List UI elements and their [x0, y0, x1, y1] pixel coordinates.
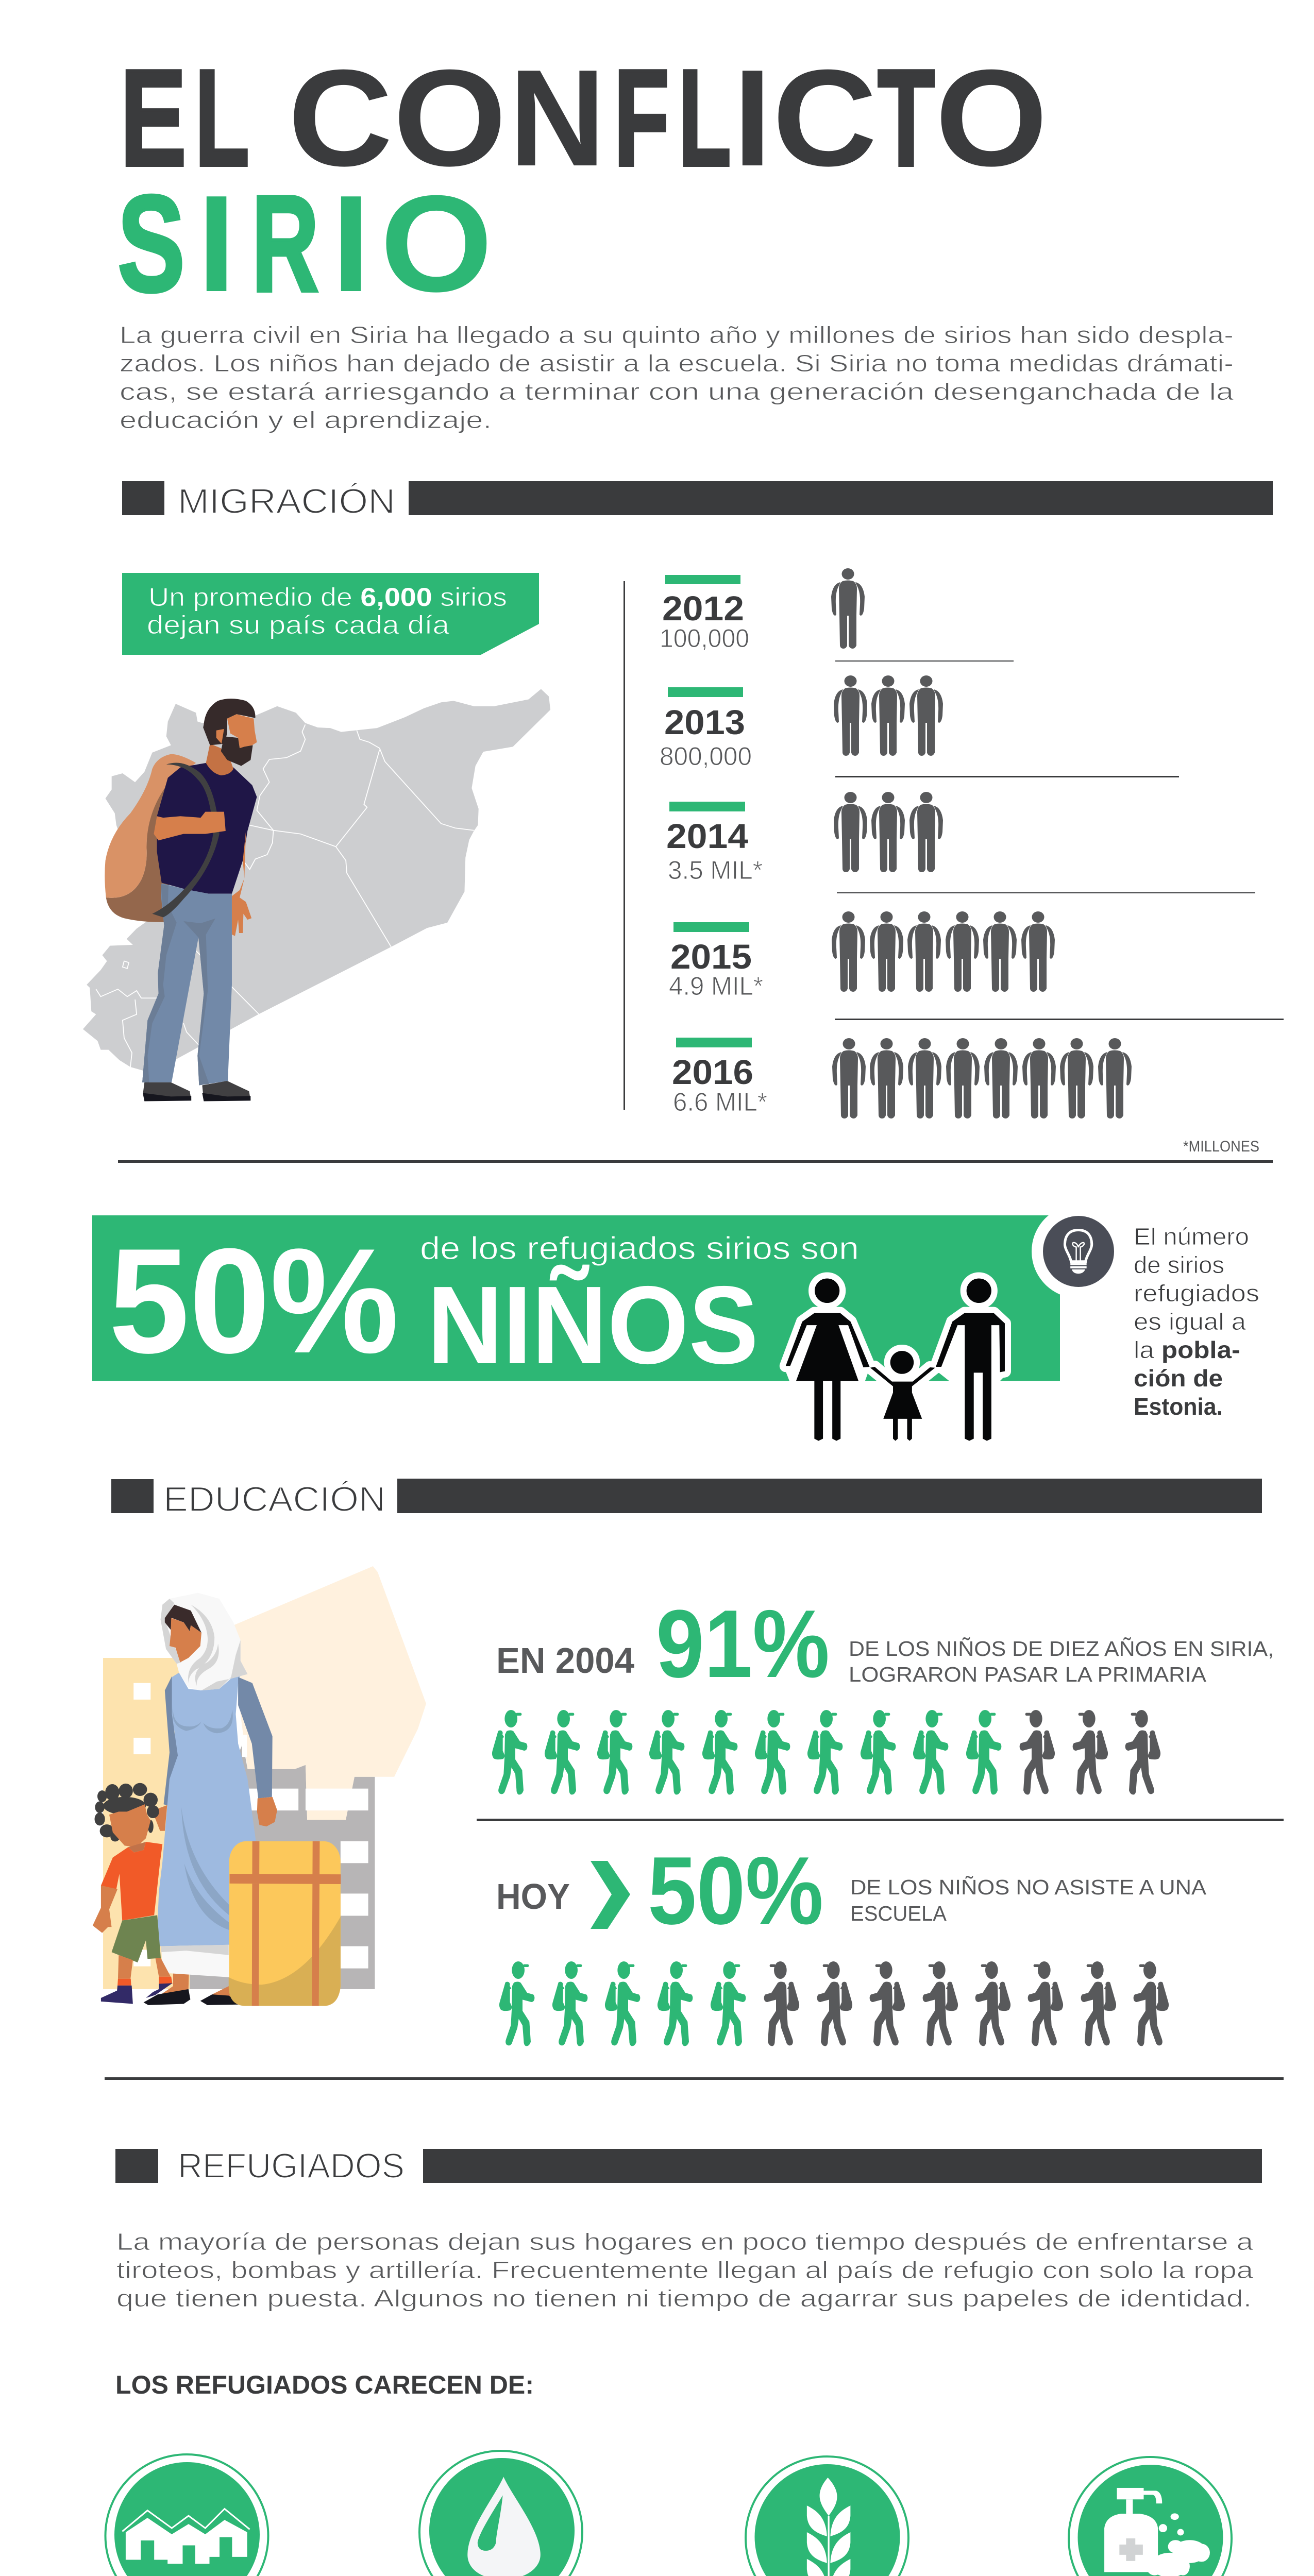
refugiados text — [116, 2228, 1254, 2312]
intro text: educación y el aprendizaje. — [120, 406, 492, 433]
title: E — [120, 41, 187, 195]
year 2016: 6.6 MIL* — [673, 1088, 767, 1116]
banner: 50% niños: NIÑOS — [427, 1263, 759, 1387]
title: C — [772, 41, 877, 195]
section header: migración — [122, 481, 1273, 521]
year 2014: 2014 — [666, 817, 748, 856]
title: R — [251, 166, 319, 320]
section header: migración: MIGRACIÓN — [178, 482, 395, 521]
map of Syria — [83, 689, 550, 1071]
year 2015: 4.9 MIL* — [669, 972, 763, 1001]
year 2013 — [660, 675, 1179, 777]
year 2013: 800,000 — [660, 742, 752, 771]
year 2015 — [669, 911, 1284, 1020]
title: O — [393, 41, 507, 195]
section header: refugiados — [115, 2146, 1262, 2185]
year 2015: 2015 — [670, 938, 752, 976]
title: N — [509, 41, 605, 195]
icon row: 50% of children — [499, 1961, 1169, 2046]
title: O — [380, 166, 493, 320]
stat: 2004 91%: LOGRARON PASAR LA PRIMARIA — [849, 1663, 1207, 1686]
subheading: carecen de: LOS REFUGIADOS CARECEN DE: — [115, 2370, 534, 2399]
title: T — [878, 41, 935, 195]
title: L — [678, 41, 731, 195]
callout: Estonia comparison: Estonia. — [1134, 1393, 1223, 1420]
year 2012: 100,000 — [660, 624, 749, 653]
title: F — [614, 41, 669, 195]
intro text: zados. Los niños han dejado de asistir a la escuela. Si Siria no toma medidas drámati- — [120, 350, 1234, 377]
icon: lightbulb — [1043, 1216, 1114, 1287]
intro text: La guerra civil en Siria ha llegado a su quinto año y millones de sirios han sido despla- — [120, 321, 1234, 348]
year 2014 — [666, 792, 1255, 893]
icon: family silhouette — [786, 1278, 1005, 1441]
title — [117, 41, 1048, 320]
callout: Estonia comparison: de sirios — [1134, 1251, 1224, 1278]
banner: 50% niños — [92, 1200, 1137, 1387]
stat: today over 50%: ESCUELA — [850, 1902, 947, 1925]
timeline axis — [624, 581, 625, 1110]
callout: Estonia comparison: la pobla- — [1134, 1336, 1240, 1363]
icon: water drop — [419, 2451, 582, 2576]
section header: refugiados: REFUGIADOS — [178, 2146, 405, 2185]
stat: 2004 91%: 91% — [656, 1590, 830, 1698]
icon: wheat — [746, 2456, 908, 2576]
callout: 6,000 per day: dejan su país cada día — [147, 611, 449, 639]
stat: today over 50% — [496, 1837, 1207, 1944]
banner: 50% niños: de los refugiados sirios son — [420, 1231, 859, 1266]
year 2013: 2013 — [664, 703, 745, 742]
title: O — [935, 41, 1048, 195]
illustration: man with backpack — [105, 699, 257, 1101]
title: S — [117, 166, 185, 320]
section header: educación: EDUCACIÓN — [163, 1480, 385, 1519]
title: C — [288, 41, 393, 195]
illustration: mother and child with suitcase — [93, 1566, 426, 2006]
year 2012 — [660, 568, 1014, 662]
year 2016 — [672, 1038, 1132, 1118]
refugiados text: La mayoría de personas dejan sus hogares en poco tiempo después de enfrentarse a — [116, 2228, 1254, 2255]
year 2012: 2012 — [662, 589, 744, 628]
banner: 50% niños: 50% — [109, 1217, 399, 1384]
refugiados text: que tienen puesta. Algunos no tienen ni tiempo de agarrar sus papeles de identidad. — [116, 2285, 1252, 2312]
icon row: 91% of children — [492, 1710, 1160, 1794]
stat: today over 50%: 50% — [648, 1837, 823, 1944]
intro text: cas, se estará arriesgando a terminar con una generación desenganchada de la — [120, 378, 1234, 405]
callout: Estonia comparison: es igual a — [1134, 1308, 1246, 1335]
year 2016: 2016 — [672, 1053, 753, 1092]
callout: Estonia comparison: ción de — [1134, 1365, 1223, 1392]
callout: Estonia comparison: El número — [1134, 1223, 1249, 1250]
callout: 6,000 per day: Un promedio de 6,000 sirios — [148, 583, 507, 612]
stat: 2004 91% — [496, 1590, 1274, 1698]
callout: Estonia comparison: refugiados — [1134, 1280, 1259, 1307]
callout: 6,000 per day — [122, 573, 539, 655]
stat: 2004 91%: DE LOS NIÑOS DE DIEZ AÑOS EN SIRIA, — [849, 1637, 1274, 1660]
stat: today over 50%: DE LOS NIÑOS NO ASISTE A UNA — [850, 1875, 1207, 1899]
title: L — [195, 41, 248, 195]
footnote: millones: *MILLONES — [1183, 1138, 1259, 1155]
title: I — [332, 166, 370, 320]
icon: shelter — [105, 2454, 268, 2576]
icon: soap — [1069, 2457, 1232, 2576]
section header: educación — [111, 1479, 1262, 1519]
callout: Estonia comparison — [1134, 1223, 1259, 1420]
title: I — [733, 41, 771, 195]
year 2014: 3.5 MIL* — [668, 856, 763, 885]
stat: 2004 91%: EN 2004 — [496, 1640, 634, 1681]
intro text — [120, 321, 1234, 433]
stat: today over 50%: HOY — [496, 1876, 570, 1917]
refugiados text: tiroteos, bombas y artillería. Frecuentemente llegan al país de refugio con solo la ropa — [116, 2257, 1254, 2283]
title: I — [197, 166, 235, 320]
